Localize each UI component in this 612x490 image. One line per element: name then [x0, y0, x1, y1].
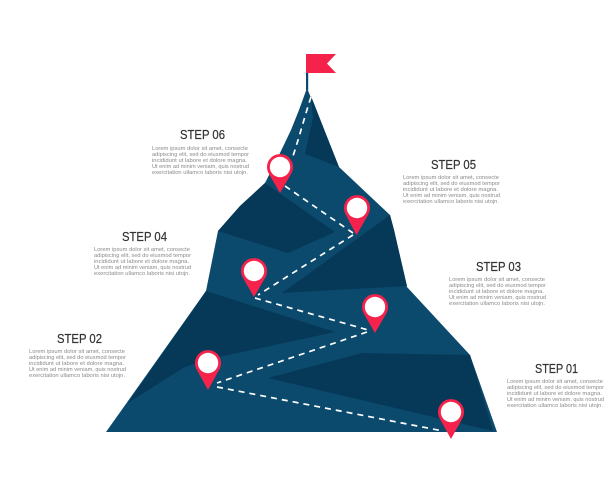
text block: step 01: Lorem ipsum dolor sit amet, consecte — [507, 379, 603, 385]
text block: step 06: incididunt ut labore et dolore magna. — [152, 158, 247, 164]
mountain base shape — [106, 88, 497, 432]
text block: step 03: incididunt ut labore et dolore magna. — [449, 289, 544, 295]
text block: step 05 — [403, 158, 500, 205]
dashed climbing route — [217, 97, 443, 431]
pin: step 06 — [267, 154, 293, 193]
mountain — [106, 88, 497, 432]
pin: step 04 — [241, 258, 267, 297]
text block: step 04: exercitation ullamco laboris nisi utojn. — [94, 271, 190, 277]
text block: step 03 — [449, 260, 546, 307]
text block: step 01: STEP 01 — [535, 362, 578, 376]
text block: step 04: incididunt ut labore et dolore magna. — [94, 259, 189, 265]
text block: step 05: STEP 05 — [431, 158, 476, 172]
text block: step 05: Ut enim ad minim veniam, quis nostrud — [403, 193, 500, 199]
text block: step 04 — [94, 230, 191, 277]
text block: step 03: Lorem ipsum dolor sit amet, consecte — [449, 277, 545, 283]
text block: step 01: Ut enim ad minim veniam, quis nostrud — [507, 397, 604, 403]
text block: step 04: Ut enim ad minim veniam, quis nostrud — [94, 265, 191, 271]
text block: step 05: incididunt ut labore et dolore magna. — [403, 187, 498, 193]
text block: step 06: adipiscing elit, sed do eiusmod tempor — [152, 152, 249, 158]
summit shadow facet — [305, 96, 339, 167]
upper left shadow facet — [218, 183, 335, 253]
text block: step 04: adipiscing elit, sed do eiusmod tempor — [94, 253, 191, 259]
text block: step 03: Ut enim ad minim veniam, quis nostrud — [449, 295, 546, 301]
text block: step 02 — [29, 332, 126, 379]
text block: step 03: exercitation ullamco laboris nisi utojn. — [449, 301, 545, 307]
text block: step 02: Ut enim ad minim veniam, quis nostrud — [29, 367, 126, 373]
pin: step 01 — [438, 399, 464, 439]
text block: step 02: exercitation ullamco laboris nisi utojn. — [29, 373, 125, 379]
text block: step 01: incididunt ut labore et dolore magna. — [507, 391, 602, 397]
text block: step 01: exercitation ullamco laboris nisi utojn. — [507, 403, 603, 409]
text block: step 06 — [152, 128, 249, 176]
text block: step 06: Ut enim ad minim veniam, quis nostrud — [152, 164, 249, 170]
text block: step 01: adipiscing elit, sed do eiusmod tempor — [507, 385, 604, 391]
text block: step 04: STEP 04 — [122, 230, 167, 244]
text block: step 06: exercitation ullamco laboris nisi utojn. — [152, 170, 248, 176]
text block: step 05: exercitation ullamco laboris nisi utojn. — [403, 199, 499, 205]
text block: step 03: adipiscing elit, sed do eiusmod tempor — [449, 283, 546, 289]
text block: step 01 — [507, 362, 604, 409]
middle left shadow facet — [128, 291, 335, 403]
text block: step 03: STEP 03 — [476, 260, 521, 274]
text block: step 02: incididunt ut labore et dolore magna. — [29, 361, 124, 367]
text block: step 02: adipiscing elit, sed do eiusmod tempor — [29, 355, 126, 361]
text block: step 05: adipiscing elit, sed do eiusmod tempor — [403, 181, 500, 187]
text block: step 02: Lorem ipsum dolor sit amet, consecte — [29, 349, 125, 355]
pin: step 05 — [344, 195, 370, 235]
pin: step 02 — [195, 350, 221, 390]
text block: step 02: STEP 02 — [57, 332, 102, 346]
upper right shadow facet — [282, 215, 407, 293]
lower right shadow facet — [268, 353, 493, 431]
text block: step 04: Lorem ipsum dolor sit amet, consecte — [94, 247, 190, 253]
text block: step 06: STEP 06 — [180, 128, 225, 142]
text block: step 06: Lorem ipsum dolor sit amet, consecte — [152, 146, 248, 152]
text block: step 05: Lorem ipsum dolor sit amet, consecte — [403, 175, 499, 181]
flag on summit — [306, 54, 336, 90]
pin: step 03 — [362, 294, 388, 333]
